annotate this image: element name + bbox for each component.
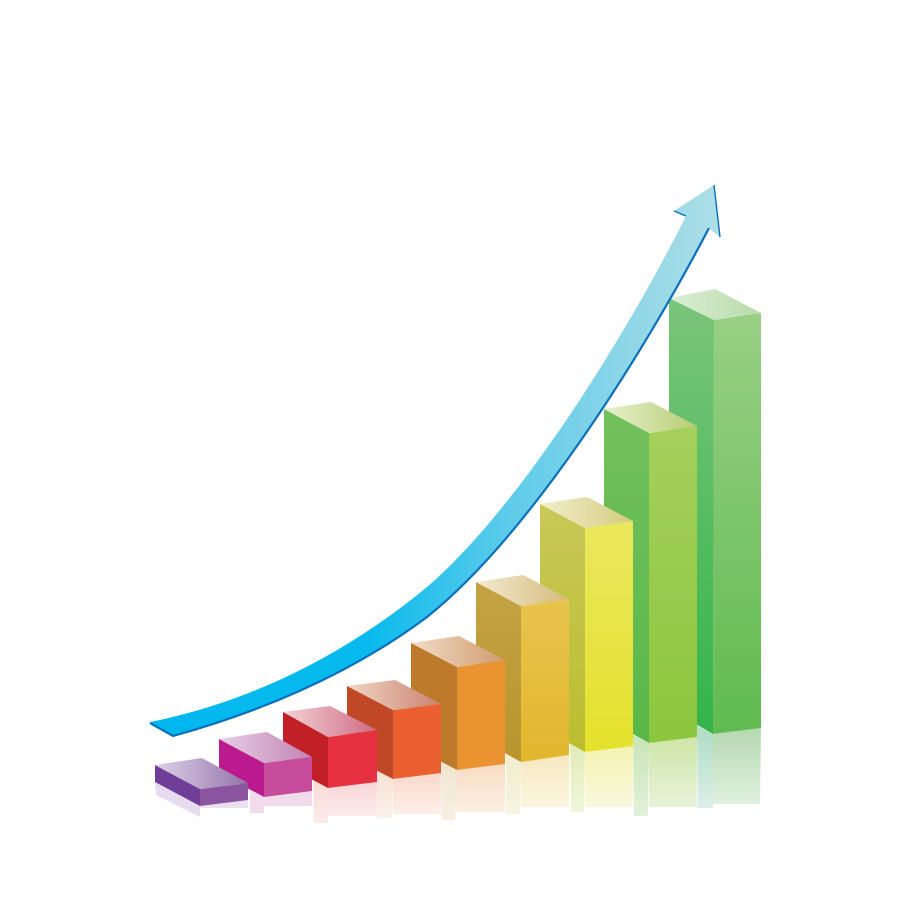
bar 8: light green bbox=[604, 402, 697, 743]
arrow head edges bbox=[674, 185, 720, 237]
bar 4: red-orange bbox=[347, 680, 441, 779]
bar 6: amber bbox=[476, 575, 569, 762]
growth arrow bbox=[150, 185, 720, 736]
bar 5: orange bbox=[411, 636, 505, 770]
bar 2: magenta bbox=[219, 732, 312, 797]
arrow lower edge bbox=[150, 228, 709, 736]
bar 1: purple bbox=[155, 758, 248, 806]
floor reflections of the bars bbox=[155, 726, 761, 823]
bar 7: yellow bbox=[540, 497, 633, 752]
bar 9: green bbox=[669, 289, 761, 734]
bar 3: red bbox=[283, 706, 377, 788]
